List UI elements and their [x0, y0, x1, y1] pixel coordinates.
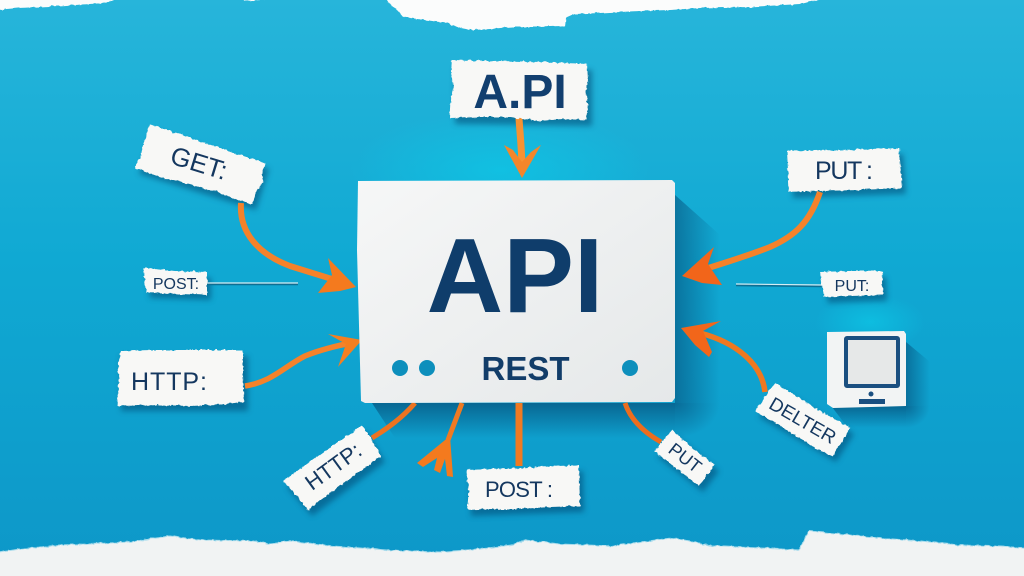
- arrow: rotated HTTP to card: [372, 403, 415, 438]
- label: small POST: [143, 268, 207, 295]
- arrow: forked lower arrow: [417, 403, 462, 477]
- label: DELTER: [755, 383, 850, 456]
- label: small POST: POST:: [153, 276, 199, 293]
- icon: monitor tile: [827, 331, 906, 408]
- label: small right PUT: [820, 271, 883, 297]
- shadows cast by card, tile and tags: [121, 66, 930, 516]
- label: top A.PI: [450, 60, 588, 121]
- label: rotated HTTP: HTTP:: [300, 438, 366, 495]
- card holes and REST label: REST: [481, 350, 570, 387]
- label: HTTP: [117, 350, 244, 406]
- label: rotated HTTP: [283, 425, 381, 510]
- label: top A.PI: A.PI: [473, 66, 567, 119]
- arrow: DELTER to card: [681, 321, 765, 392]
- arrow: POST connector: [516, 403, 522, 466]
- label: rotated PUT: PUT: [665, 439, 705, 477]
- label: top-right PUT: [787, 148, 902, 192]
- label: GET: GET:: [167, 140, 231, 186]
- label: POST: [466, 465, 580, 510]
- arrow: API tag to card: [504, 118, 541, 178]
- label: top-right PUT: PUT :: [815, 157, 873, 185]
- wire: right PUT connector: [736, 284, 822, 286]
- top torn white paper edge: [0, 0, 830, 30]
- wire: left POST connector: [205, 283, 298, 284]
- label: rotated PUT: [654, 430, 715, 486]
- label: POST: POST :: [485, 477, 553, 502]
- label: GET: [135, 124, 265, 204]
- bottom torn white paper edge: [0, 531, 1024, 576]
- panel: central API card: [357, 180, 675, 403]
- arrow: PUT to card: [682, 192, 820, 285]
- arrow: GET to API card: [241, 203, 356, 293]
- arrow: lower PUT connector: [625, 403, 661, 442]
- label: small right PUT: PUT:: [835, 278, 869, 295]
- label: DELTER: DELTER: [765, 394, 839, 449]
- arrow: HTTP to card: [245, 334, 362, 386]
- label: HTTP: HTTP:: [131, 368, 207, 396]
- card holes and REST label: [392, 350, 638, 387]
- heading: API: API: [427, 217, 603, 335]
